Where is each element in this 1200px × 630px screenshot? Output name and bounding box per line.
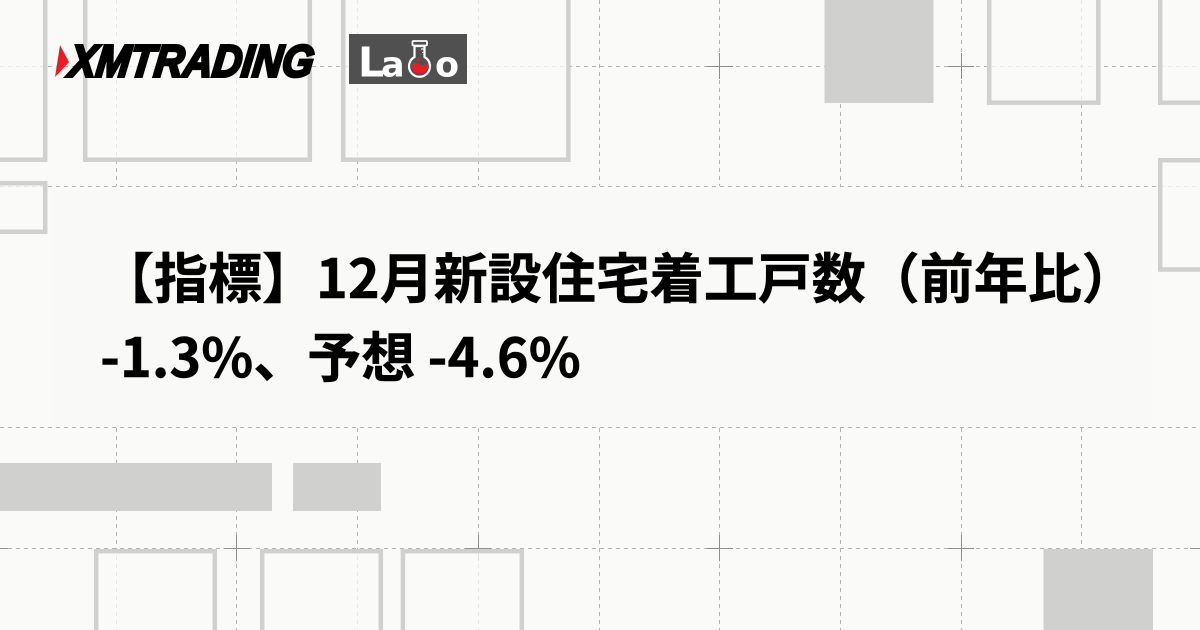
logo: XMTRADING: XMTRADING [64,36,317,86]
logo: Lab: a [381,46,405,86]
logo: Lab [349,34,467,86]
title [100,235,1136,393]
central text panel [50,187,1152,427]
title: -1.3%、予想 -4.6% [100,314,581,393]
logo: Lab: L [358,38,384,86]
title: 【指標】12月新設住宅着工戸数（前年比） [100,235,1136,314]
logo: Lab: o [435,46,459,86]
icon: flask [409,41,430,77]
